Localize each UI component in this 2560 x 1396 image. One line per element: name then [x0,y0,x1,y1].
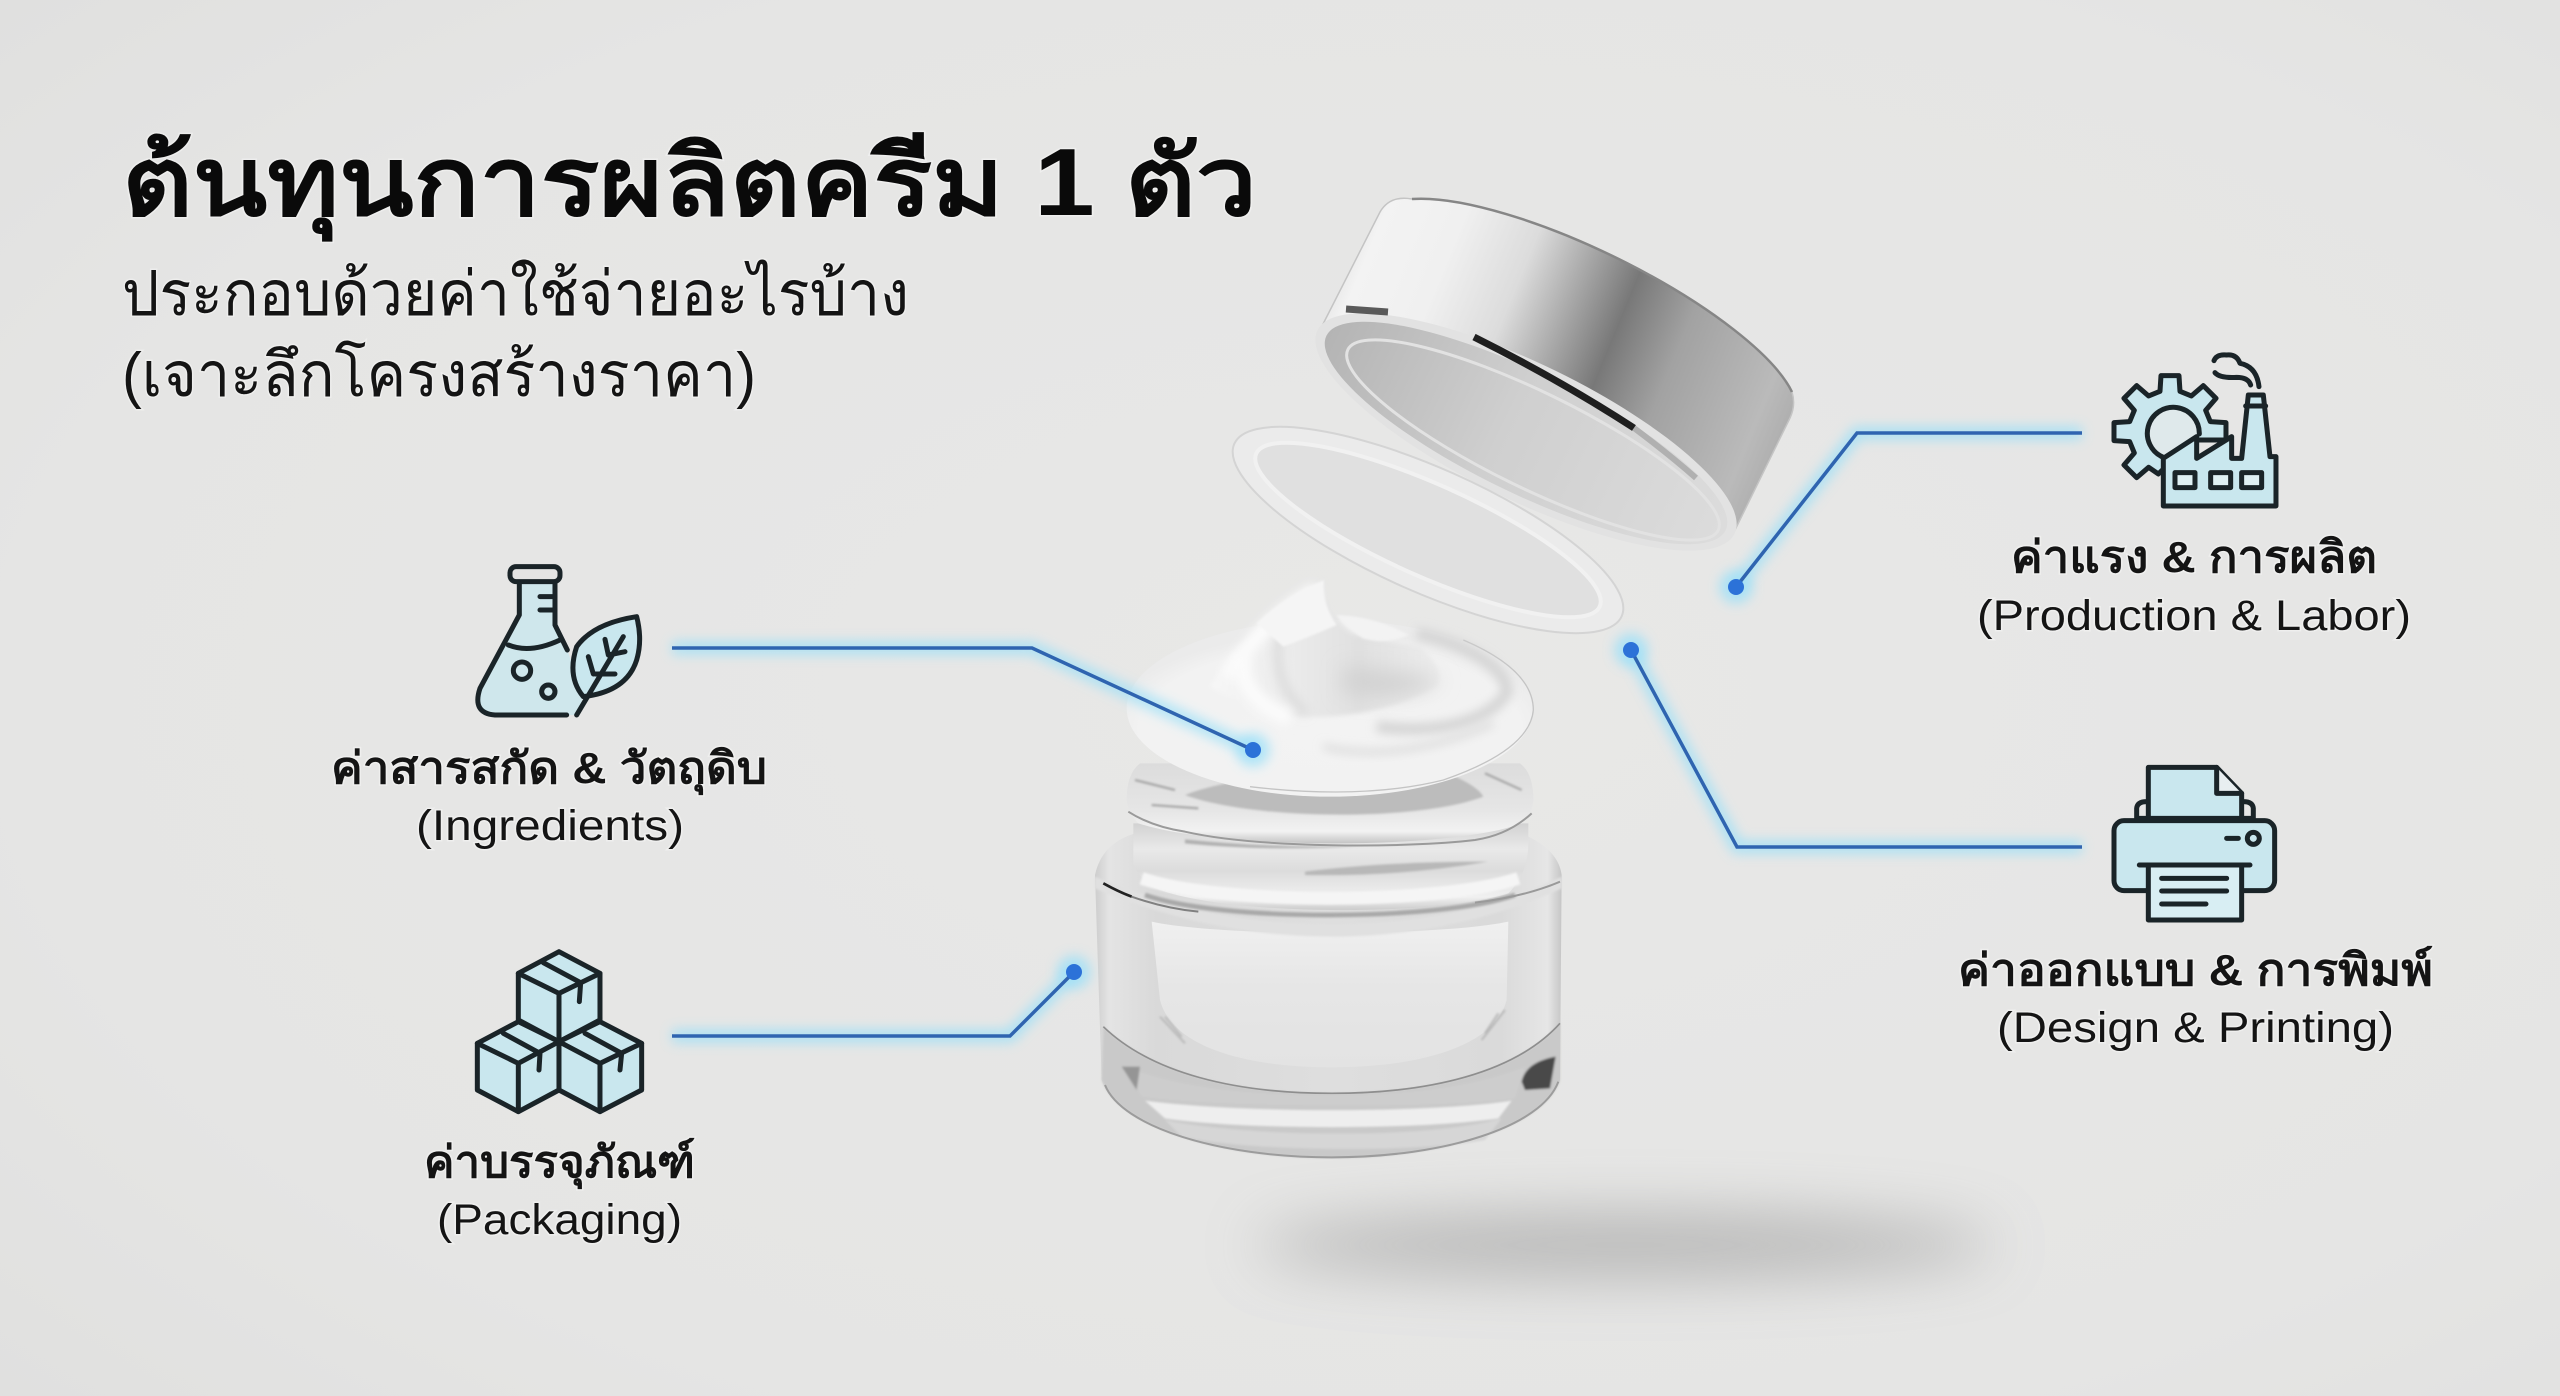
subtitle line 2: (เจาะลึกโครงสร้างราคา) [122,340,756,410]
inner seal disc [1209,387,1647,673]
label: design and printing [1958,945,2433,1052]
label: production and labor [1977,533,2411,640]
icon: flask and leaf [478,567,640,715]
callout line: ingredients [672,648,1263,760]
icon: stacked boxes [477,952,642,1112]
Thai label: ค่าสารสกัด & วัตถุดิบ [331,744,767,796]
jar body [1095,833,1562,1158]
callout line: production [1726,433,2082,597]
illustration: cream jar with lid [1095,198,1794,1158]
floating shadow under jar [1255,1215,1995,1275]
English label: (Ingredients) [416,802,684,850]
icon: printer [2114,767,2275,920]
whipped cream swirl [1127,580,1533,797]
icon: gear and factory [2114,355,2276,506]
English label: (Packaging) [437,1196,682,1244]
inner white cup [1152,922,1508,1067]
English label: (Production & Labor) [1977,592,2411,640]
label: ingredients [331,744,767,850]
jar lip [1127,763,1533,843]
label: packaging [424,1137,695,1244]
jar base bands [1102,1023,1560,1158]
Thai label: ค่าออกแบบ & การพิมพ์ [1958,945,2433,995]
callout line: design [1621,640,2082,847]
title: ต้นทุนการผลิตครีม 1 ตัว [122,129,1257,242]
English label: (Design & Printing) [1997,1004,2394,1052]
glass jar [1095,763,1562,1158]
jar lid [1288,198,1794,595]
jar neck [1133,823,1528,910]
subtitle line 1: ประกอบด้วยค่าใช้จ่ายอะไรบ้าง [122,259,909,329]
Thai label: ค่าแรง & การผลิต [2011,533,2377,582]
callout line: packaging [672,962,1084,1036]
Thai label: ค่าบรรจุภัณฑ์ [424,1137,695,1190]
heading block [122,129,1257,410]
